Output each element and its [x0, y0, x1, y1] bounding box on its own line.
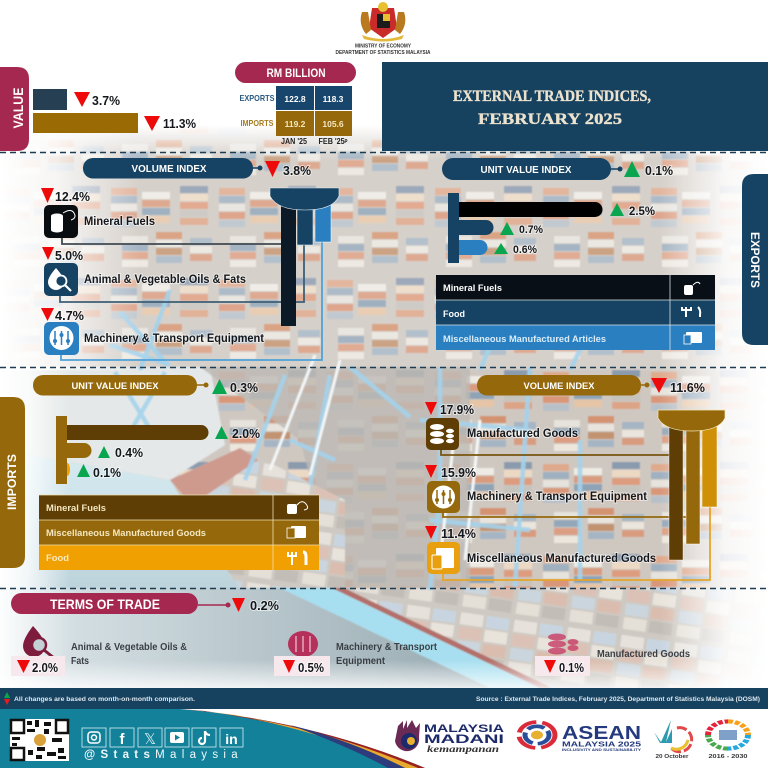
- social media icons and handle: @StatsMalaysia: [84, 749, 243, 761]
- tab: IMPORTS: [0, 397, 25, 568]
- tab: VALUE: [0, 67, 29, 151]
- panel: imports volume index: 11.6%: [670, 381, 705, 395]
- horizontal bar chart: 2.0%: [232, 427, 260, 441]
- item: miscellaneous manufactured goods: 11.4%: [441, 527, 476, 541]
- social media icons and handle: in: [225, 731, 238, 747]
- item: machinery and transport equipment: 4.7%: [55, 309, 84, 323]
- item: manufactured goods: [425, 402, 578, 450]
- item: oils and fats: 2.0%: [32, 661, 58, 675]
- item: manufactured goods: Manufactured Goods: [467, 426, 578, 440]
- value bar chart: 3.7%: [92, 94, 120, 108]
- footer teal band with coloured swoosh: [0, 709, 425, 768]
- social media icons and handle: f: [120, 731, 126, 748]
- panel: RM billion table: RM BILLION: [266, 68, 326, 80]
- item: machinery and transport equipment: Machinery & Transport Equipment: [467, 489, 647, 503]
- icon: red down triangle: [232, 598, 245, 612]
- connector lines: [441, 449, 710, 580]
- logo: ASEAN Malaysia 2025: INCLUSIVITY AND SUSTAINABILITY: [562, 748, 642, 752]
- icon: green up triangle: [212, 379, 227, 394]
- heading pill: [11, 593, 198, 614]
- item: machinery and transport equipment: [41, 308, 264, 355]
- crest and ministry heading: MINISTRY OF ECONOMY: [355, 44, 411, 50]
- funnel bar chart: [270, 188, 339, 326]
- horizontal bar chart: 0.7%: [519, 224, 543, 236]
- panel: RM billion table: EXPORTS: [240, 93, 275, 103]
- panel: imports unit value index: [33, 375, 319, 570]
- icon: red down triangle: [74, 92, 90, 107]
- item: machinery: 0.5%: [298, 661, 324, 675]
- legend table: Food: [443, 309, 465, 319]
- icon: red down triangle: [265, 161, 280, 177]
- footer note band: All changes are based on month-on-month comparison.: [14, 696, 195, 703]
- item: mineral fuels: 12.4%: [55, 190, 90, 204]
- panel: exports volume index: 3.8%: [283, 164, 311, 178]
- connector lines: [60, 238, 322, 360]
- heading pill: [477, 375, 641, 396]
- value bar chart: [33, 89, 196, 133]
- item: miscellaneous manufactured goods: Miscellaneous Manufactured Goods: [467, 551, 656, 565]
- icon: green up triangle: [624, 161, 640, 177]
- value bar chart: 11.3%: [163, 117, 196, 131]
- logo: SDG wheel: [708, 721, 748, 760]
- heading pill: VOLUME INDEX: [132, 164, 207, 175]
- legend table: Miscellaneous Manufactured Goods: [46, 528, 206, 538]
- panel: exports unit value index: [436, 158, 715, 350]
- item: oils and fats: [11, 626, 187, 676]
- item: machinery: [274, 631, 438, 676]
- dashed separators: [0, 152, 768, 588]
- panel: terms of trade: 0.2%: [250, 599, 279, 613]
- logo: Malaysia Madani: MALAYSIA: [424, 723, 504, 735]
- horizontal bar chart: 0.4%: [115, 446, 143, 460]
- social media icons and handle: [82, 728, 243, 761]
- item: machinery and transport equipment: [425, 465, 647, 513]
- item: machinery and transport equipment: Machinery & Transport Equipment: [84, 331, 264, 345]
- panel: title: FEBRUARY 2025: [478, 111, 622, 128]
- funnel bar chart: [658, 410, 725, 560]
- item: oils and fats: Animal & Vegetable Oils &: [71, 642, 187, 653]
- footer note band: Source : External Trade Indices, February 2025, Department of Statistics Malaysia (DOSM): [476, 696, 760, 703]
- icon: red down triangle: [144, 116, 160, 131]
- tab: VALUE: VALUE: [10, 88, 26, 128]
- panel: title: [382, 62, 768, 151]
- horizontal bar chart: 0.6%: [513, 244, 537, 256]
- item: oils and fats: Fats: [71, 656, 89, 667]
- panel: RM billion table: IMPORTS: [240, 118, 274, 128]
- icon: instagram: [88, 732, 100, 743]
- heading pill: [83, 158, 253, 178]
- tab: IMPORTS: IMPORTS: [5, 454, 19, 510]
- item: animal and vegetable oils and fats: Animal & Vegetable Oils & Fats: [84, 272, 246, 286]
- item: machinery and transport equipment: 15.9%: [441, 466, 476, 480]
- panel: imports volume index: [425, 375, 725, 580]
- heading pill: TERMS OF TRADE: [50, 596, 160, 612]
- item: miscellaneous manufactured goods: [425, 526, 656, 574]
- panel: RM billion table: FEB '25ᵖ: [318, 137, 348, 146]
- logo: ASEAN Malaysia 2025: ASEAN: [562, 723, 641, 743]
- panel: RM billion table: 105.6: [322, 119, 344, 129]
- logo: SDG wheel: 2016 - 2030: [708, 754, 748, 760]
- logo: Malaysia Madani: kemampanan: [427, 745, 499, 755]
- item: machinery: Machinery & Transport: [336, 642, 438, 653]
- horizontal bar chart: 0.1%: [93, 466, 121, 480]
- heading pill: VOLUME INDEX: [524, 381, 595, 392]
- icon: tiktok: [199, 731, 210, 744]
- item: machinery: Equipment: [336, 656, 386, 667]
- crest and ministry heading: DEPARTMENT OF STATISTICS MALAYSIA: [336, 50, 431, 56]
- tab: EXPORTS: EXPORTS: [748, 232, 762, 288]
- tab: EXPORTS: [742, 174, 768, 345]
- item: manufactured goods: [535, 634, 690, 676]
- horizontal bar chart: [448, 193, 655, 263]
- item: animal and vegetable oils and fats: [42, 247, 246, 296]
- icon: national crest: [361, 2, 405, 42]
- crest and ministry heading: [336, 2, 431, 56]
- legend table: Miscellaneous Manufactured Articles: [443, 334, 606, 344]
- logo: Malaysia Madani: MADANI: [424, 732, 504, 746]
- item: manufactured goods: Manufactured Goods: [597, 649, 690, 660]
- social media icons and handle: 𝕏: [144, 731, 156, 748]
- icon: red down triangle: [651, 378, 667, 393]
- panel: RM billion table: 119.2: [285, 119, 306, 129]
- horizontal bar chart: [56, 416, 260, 484]
- panel: RM billion table: 122.8: [284, 94, 306, 104]
- item: manufactured goods: 17.9%: [440, 403, 474, 417]
- logo: Malaysia Madani: [395, 720, 504, 755]
- legend table: Food: [46, 553, 69, 563]
- icon: youtube: [170, 732, 184, 743]
- panel: imports unit value index: 0.3%: [230, 381, 258, 395]
- horizontal bar chart: 2.5%: [629, 206, 655, 218]
- heading pill: UNIT VALUE INDEX: [480, 165, 572, 176]
- panel: RM billion table: 118.3: [323, 94, 344, 104]
- heading pill: [33, 375, 197, 396]
- legend table: Mineral Fuels: [46, 503, 106, 513]
- item: mineral fuels: [41, 188, 155, 238]
- item: animal and vegetable oils and fats: 5.0%: [55, 249, 83, 263]
- panel: RM billion table: JAN '25: [281, 137, 307, 146]
- panel: title: EXTERNAL TRADE INDICES,: [453, 88, 651, 105]
- panel: exports volume index: [41, 158, 339, 360]
- logo: ASEAN Malaysia 2025: MALAYSIA 2025: [562, 740, 641, 748]
- logo: ASEAN Malaysia 2025: [519, 722, 642, 752]
- heading pill: UNIT VALUE INDEX: [72, 381, 159, 392]
- logo: National Statistics Day: 20 October: [656, 754, 689, 760]
- heading pill: [442, 158, 611, 180]
- logo: National Statistics Day: [654, 720, 692, 760]
- legend table: [436, 275, 715, 350]
- legend table: Mineral Fuels: [443, 283, 502, 293]
- item: mineral fuels: Mineral Fuels: [84, 214, 155, 228]
- legend table: [39, 495, 319, 570]
- panel: exports unit value index: 0.1%: [645, 164, 673, 178]
- QR code: [10, 719, 69, 761]
- panel: terms of trade: [11, 593, 690, 676]
- panel: RM billion table: [235, 62, 356, 146]
- item: manufactured goods: 0.1%: [559, 661, 584, 675]
- footer note band: [0, 688, 768, 709]
